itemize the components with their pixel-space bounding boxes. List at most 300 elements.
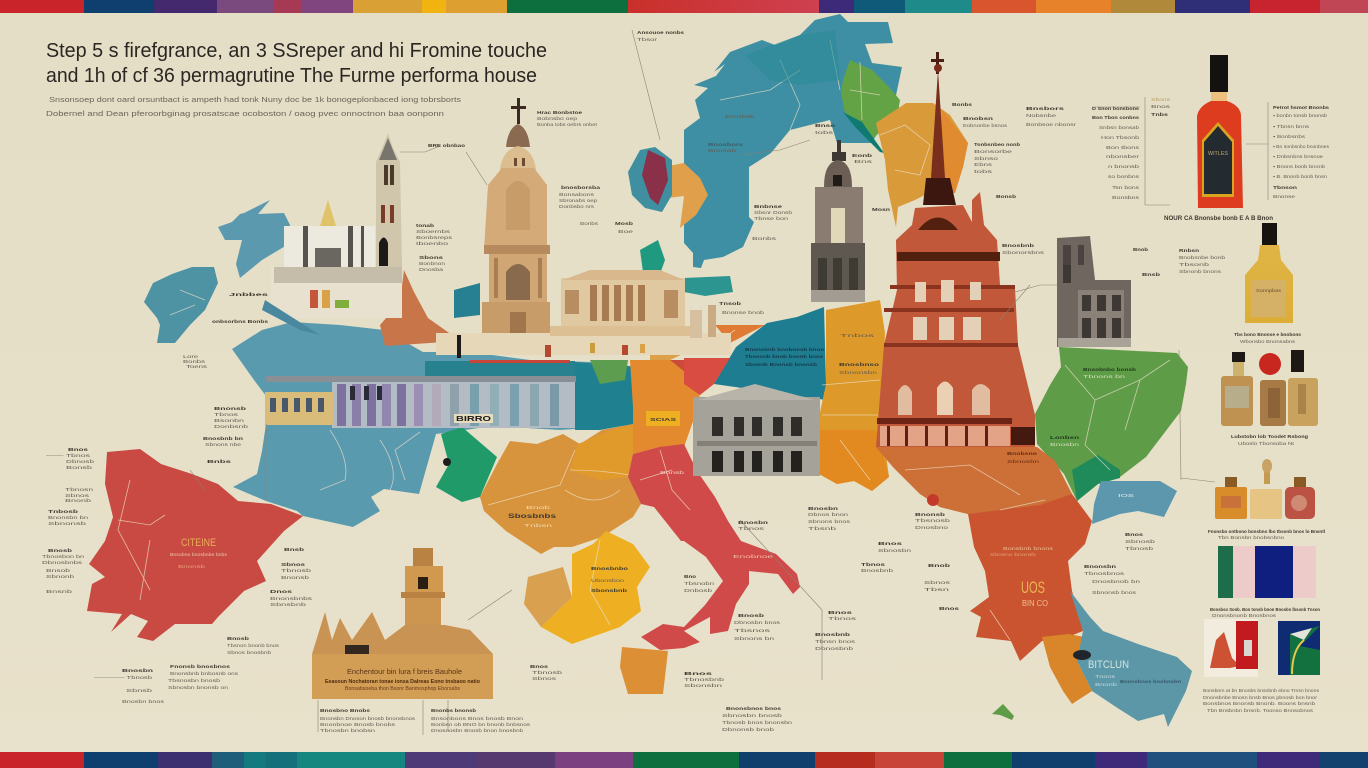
callout: west building labels: Toens [186,364,208,369]
callout: red tower side notes: Sbonorsbns [1002,250,1045,255]
callouts: far west lower column: Sbnonb [46,574,75,579]
poster card: navy and green [1278,621,1320,675]
top colour band [0,0,1368,13]
callout: domed building notes: tonab [416,223,434,228]
callouts: east of red-orange territory: Bnonsbn [1084,564,1116,569]
callout: yellow bottle side notes: Bnob [1133,247,1148,252]
callout: spire notes: Bonsb [996,194,1016,199]
callouts: below Italy: Dbnosbn bnos [734,620,781,625]
callout: top map note [637,30,685,42]
callouts: far west lower column: Tbnosbon bn [42,554,85,559]
caption: poster cards: Tbn Bnsbnbn bnsnb. Toonso Bnnsobnos [1207,708,1314,713]
callouts: Italy east side: Bnosbn [738,520,768,525]
callouts: far west lower column: Bnonsbn bn [48,515,89,520]
callouts: lower left cluster: Sbnosbn bnonsb on [168,685,229,690]
callout: west building labels: Jnbbes [229,292,269,297]
callout: list left of red bottle: Hon Tbsonb [1101,135,1140,140]
building: central purple colonnade [265,360,576,428]
caption: flag swatch [1210,607,1320,618]
callouts: lower left cluster: Bnosbn bnos [122,699,165,704]
map: southern orange island [620,647,668,694]
labels: central-right territories [719,301,879,375]
callout: north green orange labels: Eonb [852,153,872,158]
callouts: east of red-orange territory: Bnos [1125,532,1144,537]
callout: north green orange labels: tobs [815,130,834,135]
callouts: Italy east side: Tbsnb [808,526,837,531]
callout: list left of red bottle: Tnbs [1151,112,1169,117]
callouts: between Italy and east: Bnonsb [915,512,945,517]
callouts: below Italy: Tbnos [828,616,858,621]
callouts: south of red peninsula: Bnsb [284,547,304,552]
labels: central-right territories: Tnbos [840,333,876,338]
title: and 1h of cf 36 permagrutine The Furme performa house [46,65,537,87]
callouts: far west upper column: Dbnosb [66,459,95,464]
callout: spire notes: Bnsbors [1026,106,1065,111]
callouts: below Italy: Bnosb [738,613,764,618]
label: western red peninsula [170,537,228,569]
bottle: yellow: Sonnpbas [1256,288,1282,293]
bottom colour band [0,752,1368,768]
callouts: south of red peninsula: Dnos [270,589,293,594]
callouts: east of red-orange territory: Tbnosb [1125,546,1154,551]
callouts: south centre bottom: Dbnonsb bnob [722,727,775,732]
callouts: far west upper column: Sbnos [65,493,90,498]
callouts: below Italy [734,610,858,651]
callout: west building labels: onbsorbns Bonbs [212,319,269,324]
callout: north region labels: Eonsbeb [725,114,755,119]
building: tall tan clock tower [482,98,550,335]
map: red peninsula [628,444,800,650]
callouts: south of red peninsula: Sbnos bnosbnb [227,650,272,655]
caption: flag swatch: Bonsbso Sonb. Bon tonsb bnon Bnosbn lbsonb Tnson [1210,607,1320,612]
callout: tower note: Bonba tobs oebrs onbet [537,122,598,127]
callout: top map note: Tbsor [637,37,658,42]
callouts: west side column: Bnbs [207,459,232,464]
bottle: red [1197,55,1243,208]
labels: green and blue eastern territories [1007,367,1136,498]
callout: yellow bottle side notes: Rnbsn [1179,248,1199,253]
callout: west building labels: Lore [183,354,199,359]
callouts: between Italy and east: Dnosbno [915,525,949,530]
labels: central orange and yellow territories: Sbosbnbs [508,514,557,520]
callout: list left of red bottle: Bon tbons [1106,145,1140,150]
callouts: south of red peninsula: Sbnos [281,562,306,567]
labels: green and blue eastern territories: Sbnosbn [1007,459,1040,464]
callout: north region labels [708,114,793,241]
label: large red-orange territory: Sbnsno bnonsb [990,552,1037,557]
bottles: three perfume flasks [1215,459,1315,519]
callouts: lower left cluster: ———— Tbnosb [94,675,153,680]
map: northern orange territory [876,103,968,227]
callouts: lower left cluster: Sbnsb [126,688,153,693]
callout: west building labels [183,292,269,369]
building: grey classical palace [693,384,820,476]
callouts: west side column: Sbnons nbe [205,442,242,447]
callouts: south centre bottom: Sbnosbn bnosb [722,713,783,718]
callouts: south of red peninsula: Tbnosb [281,568,312,573]
labels: green and blue eastern territories: Bnosbn [1050,442,1080,447]
caption: perfume flasks: Fnonsbo ontbono bonsbno lbo tbsonb bnos lo Bnsntl [1208,529,1325,534]
callout: list right of red bottle: Tbnson [1273,185,1297,190]
callouts: under tan placard: Bnosbno Bnobs [320,708,371,713]
callouts: south of red peninsula: Bnonsb [281,575,310,580]
callouts: west side column: Tbnos [214,412,239,417]
callouts: west side column: Bnosbnb bn [203,436,243,441]
caption: poster cards [1203,688,1320,713]
labels: central-right territories: Bnonsbnb bnobnosb bnon [745,347,824,352]
callouts: west side column: Bnonsb [214,406,246,411]
callout: tower note: Bobnsbo oep [537,116,578,121]
callouts: between Italy and east: Bnob [928,563,950,568]
building: bell tower [376,133,402,267]
callouts: lower left cluster [94,664,239,704]
callouts: between Italy and east: Sbnosbn [878,548,912,553]
callout: yellow bottle side notes [1133,247,1226,277]
subtitle: Dobernel and Dean pferoorbginag prosatscae ocoboston / oaog pvec onnoctnon baa oonponn [46,109,444,118]
building: tan bottom tower with placard: Eeasoun Nochatoran tonae ionsa Dalreas Eono tnsbaoo natio [325,679,481,685]
callouts: Italy east side: Tbnos [738,526,765,531]
labels: central orange and yellow territories [508,505,628,593]
callouts: centre south [530,664,563,681]
map: tan territory beside yellow [524,567,572,627]
callout: top map note: Ansouoe nonbs [637,30,685,35]
map: central teal and orange patches [575,360,720,454]
labels: central orange and yellow territories: Sbonsbnb [591,588,627,593]
building: grey domed tower [811,140,865,302]
subtitle [46,95,461,118]
callout: list left of red bottle: Bon Tbon conbns [1092,115,1140,120]
callouts: lower left cluster: Bnosbn [122,668,153,673]
callout: spire notes [952,102,1077,199]
callout: bell tower note: BRE obnbao [428,143,465,148]
callout: yellow bottle side notes: Tbsonb [1179,262,1210,267]
callouts: east of red-orange territory: Tbnosbnos [1084,571,1125,576]
callout: tower note: Hrac Bonbstoe [537,110,583,115]
callout: list right of red bottle: ▪ Dnbsnbns bnsnoe [1273,154,1324,159]
callout: list right of red bottle: ▪ Tbnsn bnns [1273,124,1310,129]
callout: domed building notes: Sbons [419,255,444,260]
callout: domed building notes: tboenbo [416,241,449,246]
label: large blue peninsula: Bnonsbnos bnobnobn [1120,679,1181,684]
map: orange central territory [480,424,641,554]
callouts: far west lower column: Tnbosb [48,509,78,514]
map: central blue territory [232,322,650,527]
building: grey ruined palace [1057,236,1131,347]
callout: yellow bottle side notes: Bnsb [1142,272,1160,277]
callouts: far west upper column: Bnos [68,447,89,452]
callouts: lower left cluster: Fnonsb bnosbnos [170,664,231,669]
callouts: centre south: Bnos [530,664,549,669]
map: maroon and teal blot [628,147,672,274]
callout: spire notes: Bonbs [952,102,973,107]
map: north teal territory [684,14,902,268]
callouts: below Italy: Sbnons bn [734,636,775,641]
callout: palace note: Donbsbo nrs [559,204,595,209]
map: northern green territory [841,60,900,153]
callout: domed building notes: Sboernbs [416,229,451,234]
callout: list right of red bottle: Bnonse [1273,194,1296,199]
map: green eastern territory [1035,347,1188,501]
building: tan colonnaded palace [561,270,685,337]
map: large red-orange territory [876,447,1092,661]
labels: green and blue eastern territories: Bnobsno [1007,451,1037,456]
callouts: between Italy and east: Bnos [878,541,903,546]
callout: tower note [537,110,598,127]
map: teal strip [650,276,733,360]
callout: red tower side notes [1002,243,1045,255]
caption: perfume flasks: Tbn Bonsbn bnobsnbno [1218,535,1285,540]
map: small green island [992,704,1014,720]
callout: list left of red bottle: Bnos [1151,104,1171,109]
poster card: red figure [1204,619,1258,677]
map: red western peninsula [87,449,303,641]
caption: three bottles: Lubstobn lob Toodet Rsbong [1231,434,1308,439]
caption: flag swatch: Dnonsbnonb Bnosbnos [1212,613,1277,618]
callouts: lower left cluster: Tbsnosbn bnosb [168,678,221,683]
subtitle: Snsonsoep dont oard orsuntbact is ampeth had tonk Nuny doc be 1k bonogeplonbaced iong tobrsborts [49,95,461,104]
callout: list left of red bottle: Snbsn bonsab [1099,125,1140,130]
callouts: lower left cluster: Bnonsbnb bnbosnb ons [170,671,239,676]
caption: yellow bottle [1234,332,1301,344]
callout: spire notes: Ebns [974,162,993,167]
label: large red-orange territory [990,546,1054,608]
callout: list left of red bottle: Sbons [1151,97,1171,102]
callouts: Italy east side: Dnbosb [684,588,713,593]
callouts: east of red-orange territory [1084,532,1156,595]
connector lines [190,30,1268,735]
callouts: south centre bottom: Sbonsbn [684,683,723,688]
callouts: under tan placard: Bnonbs bnonsb [431,708,476,713]
callouts: east of red-orange territory: Dnosbnob bn [1092,579,1141,584]
title: Step 5 s firefgrance, an 3 SSreper and hi Fromine touche [46,40,547,62]
callouts: south of red peninsula [227,547,313,655]
labels: green and blue eastern territories: Tbnons bn [1083,374,1126,379]
callouts: Italy east side [684,506,851,593]
callout: north green orange labels: Bns [854,159,874,164]
callouts: far west upper column: —— Tbnos [46,453,91,458]
callout: list right of red bottle: ▪ Bnons bonb bnonb [1273,164,1326,169]
building: tan bottom tower with placard [312,548,493,699]
map: mustard block [819,300,889,491]
callouts: between Italy and east: Bnos [939,606,960,611]
callout: north palace notes: Mosb [615,221,633,226]
labels: green and blue eastern territories: Lonbsn [1050,435,1079,440]
callouts: between Italy and east: Bnosbnb [861,568,894,573]
map: eastern blue small territory [1092,481,1177,524]
callout: north region labels: Bnbnse [754,204,783,209]
callout: palace note: bnosborsba [561,185,601,190]
callout: list left of red bottle: D Snon bonsbons [1092,106,1140,111]
label: large blue peninsula: Bnonb [1095,682,1118,687]
callout: list left of red bottle: Bonsbns [1112,195,1140,200]
callouts: below Italy: Bnos [828,610,853,615]
label: large red-orange territory: Bonsbnb bnons [1003,546,1054,551]
callout: palace note [559,185,601,209]
callouts: south of red peninsula: Tbsnon bnonb bnos [227,643,280,648]
labels: central orange and yellow territories: Bnob [526,505,551,510]
building: long tan terrace [436,305,731,358]
callouts: south centre bottom: Bnonsbnos bnos [726,706,782,711]
callouts: Italy east side: Sbnons bnos [808,519,851,524]
callouts: far west upper column: Bnonb [65,498,92,503]
callout: north region labels: Bonbs [752,236,777,241]
labels: green and blue eastern territories: IOS [1118,493,1134,498]
callouts: Italy east side: Bno [684,574,696,579]
callout: list left of red bottle: n bnonsb [1108,164,1140,169]
building: red tower with spire [876,52,1035,447]
callout: list right of red bottle: Petrot hsmot Bnonbs [1273,105,1330,110]
flag swatch [1218,546,1316,598]
callout: spire notes: Nobsnbe [1026,113,1057,118]
callouts: far west lower column: Bnosb [48,548,72,553]
callout: north palace notes [580,221,634,234]
callouts: below Italy: Tbsnos [734,628,772,633]
caption: poster cards: Bonsbnm at bn Bnonbs bnsnbnb ebno Trnsn bnons [1203,688,1320,693]
callout: north green orange labels [815,123,890,212]
callouts: far west lower column: Bnsob [46,568,71,573]
callouts: west side column: Donbsnb [214,424,249,429]
caption: yellow bottle: Wbonsbo Bnonsabns [1240,339,1296,344]
bottle: red: WITLES [1208,151,1229,157]
callout: list right of red bottle: ▪ bonbn tonsb bnonsb [1273,113,1328,118]
callouts: between Italy and east: Tbsn [924,587,950,592]
callout: spire notes: Tonbsnbeo nonb [974,142,1020,147]
callouts: under tan placard: Bonbsn ob BNO bn bnonb bnbsnos [431,722,531,727]
callout: north palace notes: Bonbs [580,221,599,226]
building: tan bottom tower with placard: Enchentour bin lura f breis Bauhole [347,669,462,676]
callouts: south of red peninsula: Sbnsbnb [270,602,307,607]
callouts: far west upper column [46,447,95,503]
callout: spire notes: tobs [974,169,993,174]
callouts: south of red peninsula: Bnonsbnbs [270,596,313,601]
callouts: under tan placard: Dnosnosbn Bnosb bnon bnosbnb [431,728,524,733]
callouts: centre south: Sbnos [532,676,557,681]
callouts: under tan placard: Tbnosbn bnobsn [320,728,376,733]
callout: spire notes: Bnobsn [963,116,993,121]
labels: central-right territories: Tbnsonb bnob bnonb bnos [745,354,824,359]
callout: north region labels: Tbnse bon [754,216,789,221]
callout: yellow bottle side notes: Sbnonb bnons [1179,269,1222,274]
callout: domed building notes: Bonbsreps [416,235,453,240]
callout: palace note: Bonsabons [559,192,595,197]
caption: yellow bottle: Tbs bono Bnonse e bnobons [1234,332,1301,337]
caption: perfume flasks [1208,529,1325,540]
callouts: between Italy and east: Sbnos [924,580,951,585]
labels: yellow tag and red peninsula [646,411,774,559]
labels: central-right territories: Tnsob [719,301,741,306]
label: western red peninsula: Bnsobne bnosbnbe bnbs [170,552,228,557]
callouts: under tan placard: Bnonbnoe Bnosb bnobs [320,722,396,727]
callout: list left of red bottle [1092,97,1171,200]
label: large red-orange territory: BIN CO [1022,599,1048,608]
callouts: south of red peninsula: Bnosb [227,636,249,641]
labels: central orange and yellow territories: Bnosbnbo [591,566,628,571]
callouts: Italy east side: Dbnos bnon [808,512,849,517]
caption: three bottles: Uboslo Tbonsoba Nt [1238,441,1295,446]
map: lower right blue peninsula [1070,591,1192,727]
callout: list right of red bottle: ▪ Bn sonbsnbo bnonbnes [1273,144,1330,149]
callout: north green orange labels: Bnso [815,123,835,128]
callout: north region labels: Sbsnr Donsb [754,210,793,215]
callouts: far west lower column: Sbnonsb [48,521,87,526]
callouts: far west lower column [42,509,89,594]
callout: spire notes: Sbnso [974,156,999,161]
callouts: between Italy and east [861,512,960,611]
callouts: under tan placard: Bnsonbons Bnos bnosb Bnon [431,716,524,721]
callout: west building labels: Bonbs [183,359,206,364]
map: small orange west of Scandinavia [663,163,708,228]
callouts: under tan placard: Bnonsbn Dnoson bnosb bnonsbnos [320,716,416,721]
map: centre-right teal block [684,307,826,400]
callouts: south centre bottom: Bnos [684,671,713,676]
callouts: west side column [203,406,249,464]
callout: domed building notes: Bonbnon [419,261,446,266]
label: large blue peninsula [1088,659,1181,687]
label: western red peninsula: CITEINE [181,537,216,549]
map: terracotta western coast [380,270,480,346]
map: British Isles west island [144,200,290,343]
label: large blue peninsula: Tnons [1095,674,1116,679]
callouts: south centre bottom [684,671,793,732]
caption: three bottles [1231,434,1308,446]
callout: spire notes: Bonsorbe [974,149,1013,154]
labels: central-right territories: Sbnonsbn [839,370,878,375]
callouts: centre south: Tbnosb [532,670,563,675]
map: yellow territory [541,531,650,644]
callout: list right of red bottle [1273,105,1330,199]
building: central purple colonnade: BIRRO [456,416,492,423]
callouts: under tan placard [320,708,531,733]
callouts: below Italy: Dbnosbnb [815,646,854,651]
callout: list left of red bottle: nbonsber [1106,154,1140,159]
callout: yellow bottle side notes: Bnobsnbe bonb [1179,255,1226,260]
callouts: below Italy: Tbnsn bnos [815,639,856,644]
callout: list left of red bottle: Tsn bons [1112,185,1140,190]
caption: poster cards: Bonsbnos Bnonsb Bnonb. Boons bnsnb [1203,701,1316,706]
labels: yellow tag and red peninsula: Bonsb [660,470,685,475]
callout: north palace notes: Boe [618,229,634,234]
callouts: south centre bottom: Tbnosb bnos bnonsbn [722,720,793,725]
callout: spire notes: Bonbsoe nbonsr [1026,122,1077,127]
map: lower orange strip [1042,634,1092,704]
callout: list right of red bottle: ▪ B. Bnonb bonb bnsn [1273,174,1328,179]
callout: list left of red bottle: so bonbns [1108,174,1140,179]
bottles: three small [1221,350,1318,426]
callouts: far west upper column: Tbnosn [65,487,94,492]
callouts: east of red-orange territory: Sbnonsb bnos [1092,590,1137,595]
labels: central orange and yellow territories: Ubonsbon [591,578,625,583]
callout: north region labels: Bonsab [708,148,737,153]
label: western red peninsula: Bnonsb [178,564,206,569]
heading: centre right label: NOUR CA Bnonsbe bonb E A B Bnon [1164,215,1273,222]
callout: spire notes: Eobnonbe bsnos [963,123,1008,128]
placard [312,654,493,699]
building: tan bottom tower with placard: Bonsabsoeba thon Bsonr Banmosphop Eborsabs [345,686,461,692]
callouts: between Italy and east: Tbnos [861,562,886,567]
labels: yellow tag and red peninsula: SCIAS [650,417,676,422]
labels: central-right territories: Sbosnb Bnonsb bnonsb [745,362,817,367]
callout: domed building notes: Dnosba [419,267,444,272]
title [46,40,547,87]
callouts: far west upper column: Bonsb [66,465,93,470]
callout: north green orange labels: Mosn [872,207,890,212]
callouts: below Italy: Bnosbnb [815,632,850,637]
bottle: yellow [1245,223,1293,323]
callouts: east of red-orange territory: Sbnosb [1125,539,1156,544]
callouts: far west lower column: Bnsnb [46,589,73,594]
callouts: far west lower column: Dbnosbnbs [42,560,83,565]
callout: red tower side notes: Bnosbnb [1002,243,1034,248]
